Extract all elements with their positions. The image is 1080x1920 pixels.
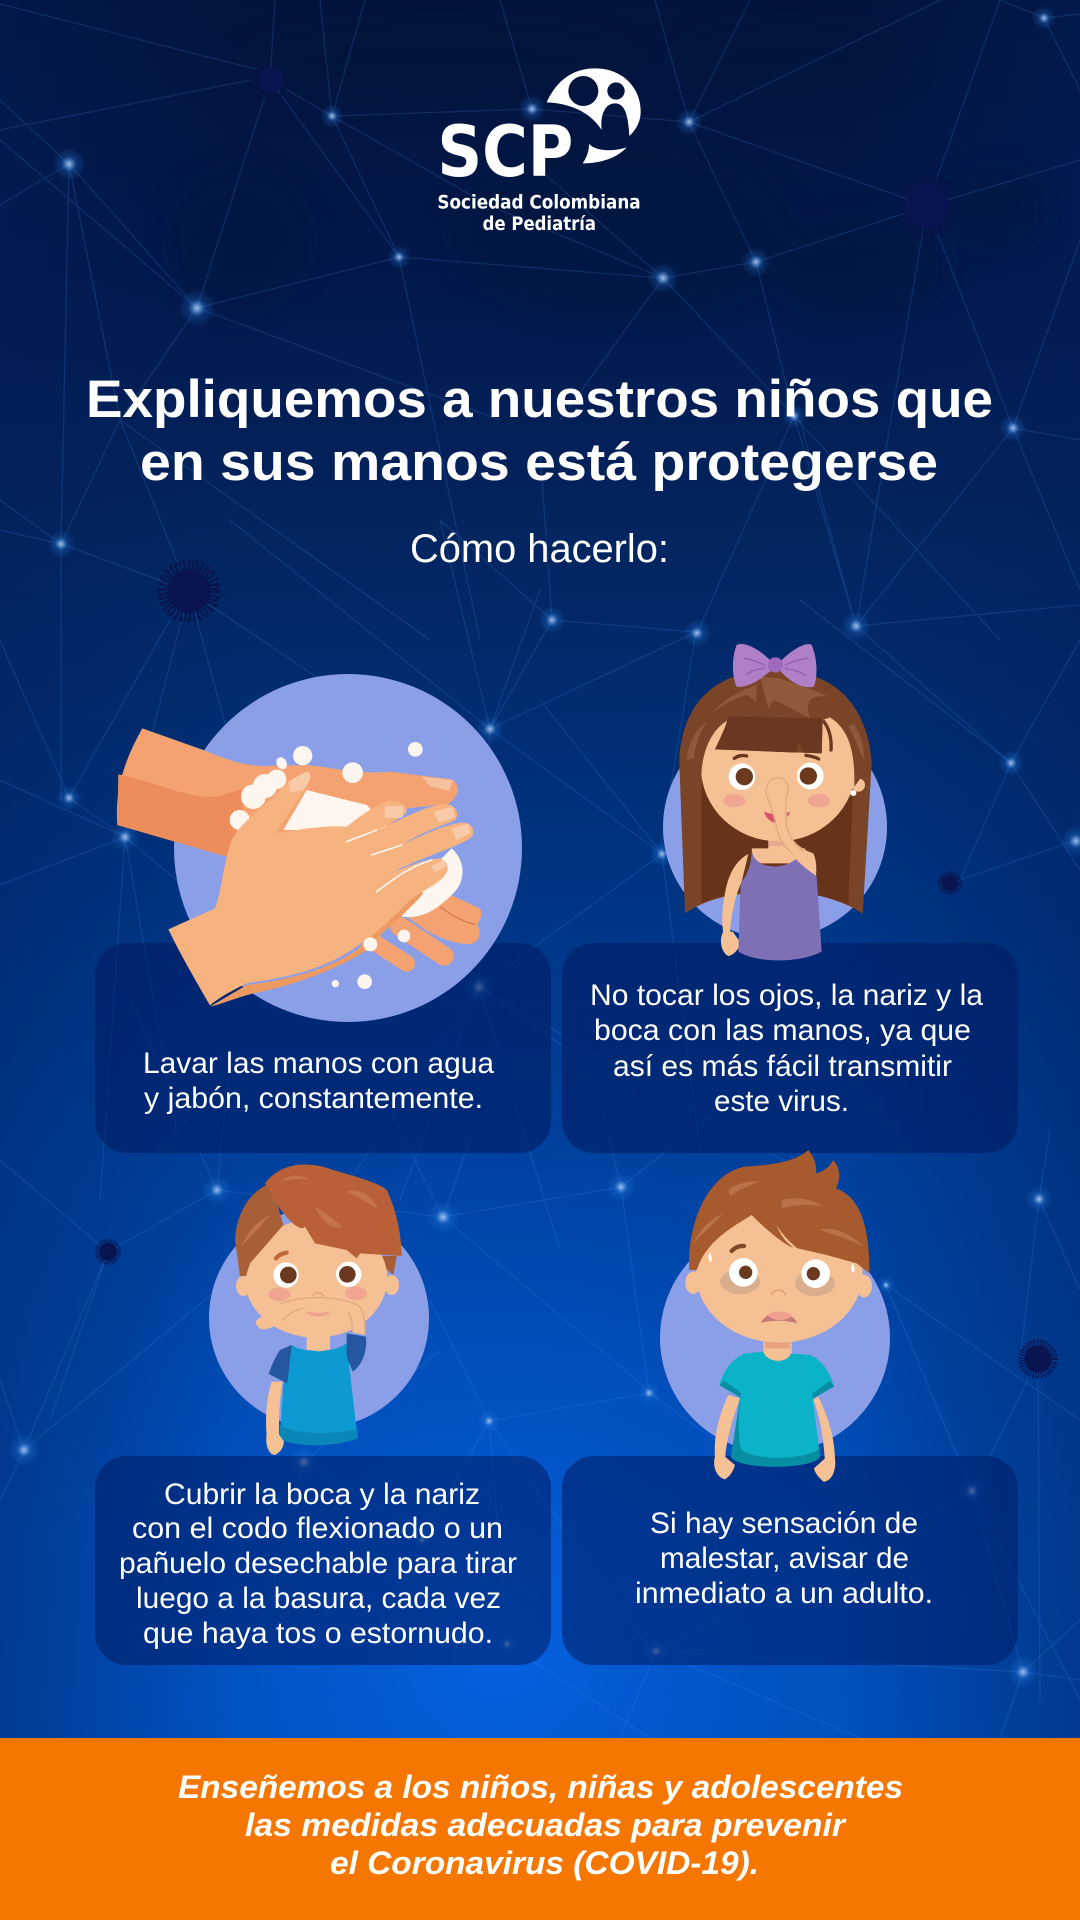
text: lavar las manos (143, 1047, 494, 1115)
logo: Sociedad Colombiana de Pediatría: de Pediatría (483, 214, 596, 235)
text: no tocar: así es más fácil transmitir (613, 1050, 952, 1083)
logo: Sociedad Colombiana de Pediatría: SCP (437, 111, 573, 193)
circle behind hands (174, 674, 522, 1022)
logo: Sociedad Colombiana de Pediatría: Sociedad Colombiana (437, 192, 641, 213)
icon: boy feeling unwell (685, 1150, 872, 1482)
panel: no tocar background (562, 943, 1018, 1153)
text: cubrir: luego a la basura, cada vez (136, 1582, 501, 1615)
text: lavar las manos: y jabón, constantemente. (144, 1082, 483, 1115)
circle behind boy unwell (660, 1223, 890, 1453)
text: lavar las manos: Lavar las manos con agua (143, 1047, 494, 1080)
title: en sus manos está protegerse (140, 433, 938, 492)
faint coronavirus silhouette in background (170, 20, 1050, 320)
coronavirus particles (96, 62, 1057, 1378)
text: cubrir: Cubrir la boca y la nariz (164, 1478, 480, 1511)
footer text (178, 1769, 903, 1881)
title: Expliquemos a nuestros niños que (86, 370, 993, 429)
text: no tocar: boca con las manos, ya que (594, 1014, 971, 1047)
circle behind girl (663, 715, 887, 939)
text: no tocar: No tocar los ojos, la nariz y la (590, 979, 983, 1012)
icon: girl touching her nose (679, 644, 872, 960)
panel: avisar background (562, 1456, 1018, 1665)
text: no tocar: este virus. (714, 1085, 849, 1118)
logo: Sociedad Colombiana de Pediatría (437, 68, 641, 235)
footer band (0, 1738, 1080, 1920)
icon: hands washing with soap (117, 728, 481, 1007)
footer text: Enseñemos a los niños, niñas y adolescentes (178, 1769, 903, 1805)
text: avisar: inmediato a un adulto. (635, 1577, 933, 1610)
text: avisar (635, 1507, 933, 1610)
text: cubrir: que haya tos o estornudo. (143, 1617, 493, 1650)
text: no tocar (590, 979, 983, 1118)
icon: boy covering mouth with his elbow (235, 1165, 402, 1455)
panel: lavar las manos background (95, 943, 551, 1153)
circle behind boy coughing (209, 1208, 429, 1428)
text: avisar: Si hay sensación de (650, 1507, 918, 1540)
title (86, 370, 993, 492)
text: avisar: malestar, avisar de (660, 1542, 909, 1575)
text: cubrir: pañuelo desechable para tirar (119, 1547, 517, 1580)
footer text: las medidas adecuadas para prevenir (245, 1807, 847, 1843)
text: cubrir: con el codo flexionado o un (132, 1512, 503, 1545)
panel: cubrir background (95, 1456, 551, 1665)
subtitle: Cómo hacerlo: (410, 527, 669, 571)
footer text: el Coronavirus (COVID-19). (330, 1845, 759, 1881)
text: cubrir (119, 1478, 517, 1650)
